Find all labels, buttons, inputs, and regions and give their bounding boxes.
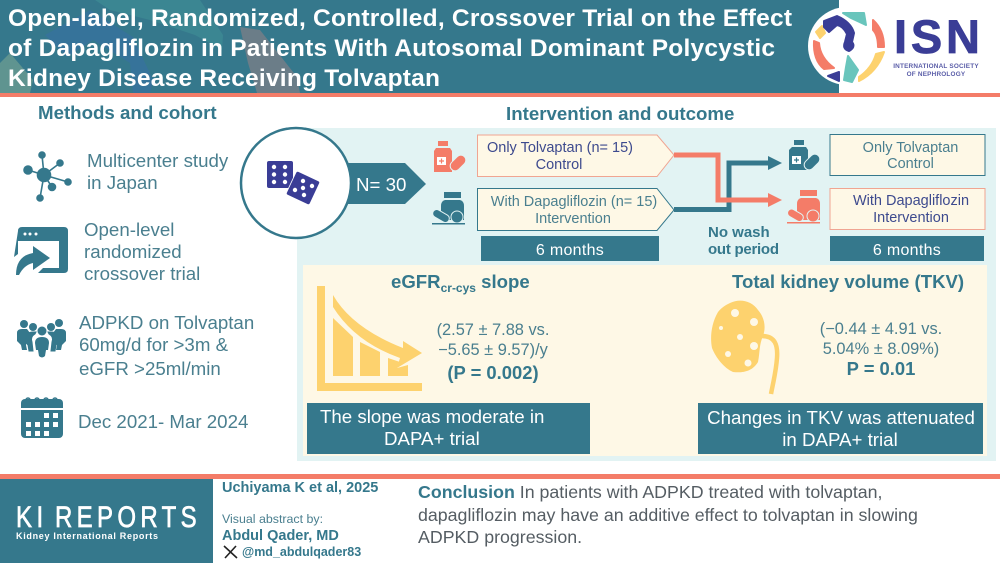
box: only tolvaptan control outcome: Control [887, 156, 934, 172]
icon: polycystic kidney [711, 301, 777, 394]
randomisation circle with dice [241, 128, 351, 238]
conclusion: ADPKD progression. [418, 527, 582, 547]
text: no wash out period: out period [708, 241, 779, 258]
panel: outcomes [303, 265, 987, 456]
text: multicenter: in Japan [87, 172, 158, 193]
citation and author: Abdul Qader, MD [222, 528, 339, 544]
6 months bar left [481, 236, 659, 261]
text: crossover: Open-level [84, 219, 174, 240]
6 months bar right: 6 months [873, 242, 941, 259]
callout: slope [307, 403, 590, 454]
text: cohort: ADPKD on Tolvaptan [79, 312, 254, 333]
conclusion [418, 482, 918, 547]
ISN logo [808, 7, 980, 85]
6 months bar left: 6 months [536, 242, 604, 259]
footer logo: KI Reports [0, 479, 213, 563]
title: Open-label, Randomized, Controlled, Crossover Trial on the Effect [8, 5, 792, 32]
N=30 arrow: N= 30 [356, 174, 406, 195]
box: only tolvaptan control [478, 135, 674, 176]
text: cohort: eGFR >25ml/min [79, 358, 221, 379]
heading: methods and cohort: Methods and cohort [38, 102, 217, 123]
icon: calendar [21, 398, 63, 438]
box: only tolvaptan control outcome: Only Tolvaptan [863, 140, 958, 156]
icon: teal bottle and pills [431, 192, 465, 224]
icon: coral bottle and pills [786, 190, 820, 224]
text: eGFR result [437, 321, 549, 383]
callout: slope: DAPA+ trial [384, 428, 480, 449]
text: TKV result: P = 0.01 [847, 358, 915, 379]
icon: teal bottle [789, 140, 822, 172]
text: TKV result: 5.04% ± 8.09%) [823, 340, 939, 358]
ISN logo: INTERNATIONAL SOCIETY [893, 63, 979, 70]
box: with dapagliflozin outcome: Intervention [873, 210, 949, 226]
icon: declining bar chart [317, 286, 422, 391]
heading: eGFR slope: eGFR [391, 271, 441, 292]
text: multicenter: Multicenter study [87, 150, 229, 171]
ISN logo: OF NEPHROLOGY [907, 71, 966, 78]
N=30 arrow [340, 163, 426, 204]
panel: methods list [14, 150, 254, 438]
6 months bar right [830, 236, 984, 261]
callout: TKV: in DAPA+ trial [782, 429, 898, 450]
citation and author: @md_abdulqader83 [242, 545, 361, 559]
heading: eGFR slope: slope [476, 271, 530, 292]
heading: intervention and outcome: Intervention and outcome [506, 103, 734, 124]
heading: TKV: Total kidney volume (TKV) [732, 271, 964, 292]
box: with dapagliflozin intervention: Intervention [535, 211, 611, 227]
title: of Dapagliflozin in Patients With Autosomal Dominant Polycystic [8, 35, 775, 62]
icon: network [24, 152, 71, 201]
title: Kidney Disease Receiving Tolvaptan [8, 65, 440, 92]
conclusion: Conclusion In patients with ADPKD treated with tolvaptan, [418, 482, 882, 502]
panel: intervention background [297, 128, 996, 461]
citation and author: Visual abstract by: [222, 512, 323, 526]
heading: eGFR slope: cr-cys [441, 281, 476, 295]
icon: people group [17, 319, 66, 358]
box: with dapagliflozin outcome: With Dapagliflozin [853, 193, 969, 209]
text: no wash out period [708, 224, 779, 258]
footer logo: KI Reports: KI [16, 499, 43, 534]
footer logo: KI Reports: Kidney International Reports [16, 531, 158, 541]
header banner [0, 0, 1000, 97]
conclusion: dapagliflozin may have an additive effect to tolvaptan in slowing [418, 505, 918, 525]
text: cohort: 60mg/d for >3m & [79, 334, 229, 355]
text: no wash out period: No wash [708, 224, 770, 241]
callout: slope: The slope was moderate in [320, 406, 544, 427]
arrow: teal crossover [674, 156, 782, 210]
footer logo: KI Reports: REPORTS [55, 499, 197, 534]
icon: coral medicine bottle [434, 141, 468, 173]
text: TKV result: (−0.44 ± 4.91 vs. [820, 320, 942, 338]
box: with dapagliflozin intervention [478, 188, 674, 230]
text: TKV result [820, 320, 942, 379]
text: crossover: randomized [84, 241, 182, 262]
box: only tolvaptan control: Control [536, 157, 582, 173]
box: with dapagliflozin outcome [830, 188, 985, 230]
callout: TKV: Changes in TKV was attenuated [707, 407, 975, 428]
arrow: coral crossover [674, 155, 782, 207]
title [8, 5, 792, 92]
icon: crossover window [14, 227, 68, 275]
citation and author [222, 480, 378, 559]
text: eGFR result: −5.65 ± 9.57)/y [438, 341, 549, 359]
citation and author: Uchiyama K et al, 2025 [222, 480, 378, 496]
box: only tolvaptan control outcome [830, 134, 985, 176]
callout: TKV [698, 403, 983, 454]
text: eGFR result: (P = 0.002) [447, 362, 539, 383]
footer rule [0, 474, 1000, 479]
text: crossover: crossover trial [84, 263, 200, 284]
box: with dapagliflozin intervention: With Dapagliflozin (n= 15) [491, 194, 657, 210]
text: eGFR result: (2.57 ± 7.88 vs. [437, 321, 549, 339]
icon: X [224, 546, 237, 558]
ISN logo: ISN [894, 10, 980, 63]
box: only tolvaptan control: Only Tolvaptan (n= 15) [487, 140, 633, 156]
text: dates: Dec 2021- Mar 2024 [78, 411, 248, 432]
